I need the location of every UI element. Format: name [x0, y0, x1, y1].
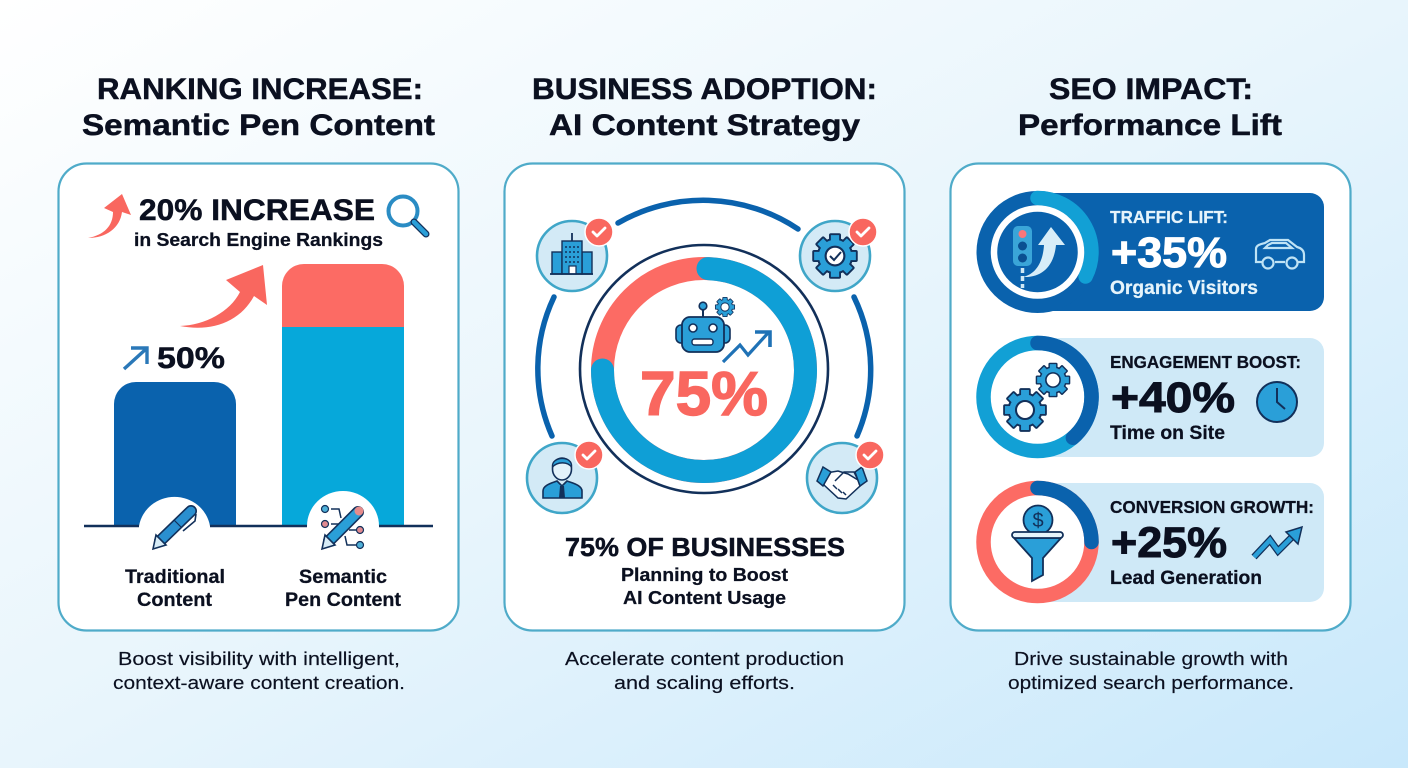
value: 50%: 50%: [157, 342, 225, 375]
title: seo impact: SEO IMPACT:: [1049, 73, 1253, 106]
caption: ranking increase: [113, 649, 405, 693]
caption: seo impact: optimized search performance.: [1008, 673, 1294, 693]
ring arc: [984, 343, 1092, 451]
icon: robot: [676, 297, 735, 352]
label: traditional content: [125, 567, 225, 611]
caption: seo impact: Drive sustainable growth with: [1014, 649, 1288, 669]
stat text: engagement boost: Time on Site: [1110, 423, 1225, 444]
icon: clock: [1257, 382, 1297, 422]
value: 75%: 75%: [640, 360, 768, 429]
panel: seo impact: [950, 164, 1350, 630]
icon: traffic light with arrow: [1013, 226, 1065, 288]
icon: semantic pen: [307, 491, 379, 562]
icon: small coral arrow: [88, 194, 131, 238]
icon: handshake: [807, 443, 877, 513]
subheading: search engine rankings: in Search Engine Rankings: [134, 230, 383, 250]
panel: ranking increase: [58, 164, 458, 630]
bar: semantic pen content: [282, 264, 404, 526]
stat text: 75% of businesses: AI Content Usage: [623, 587, 786, 608]
stat text: traffic lift: [1110, 207, 1258, 299]
orbit arcs: [538, 200, 871, 436]
bar: traditional content: [114, 382, 236, 526]
title: ranking increase: Semantic Pen Content: [82, 109, 435, 142]
stat text: engagement boost: ENGAGEMENT BOOST:: [1110, 352, 1301, 372]
stat text: 75% of businesses: Planning to Boost: [621, 564, 788, 585]
stat text: conversion growth: +25%: [1111, 519, 1227, 567]
icon: trend arrow: [723, 332, 770, 362]
icon: growth arrow: [1254, 527, 1302, 557]
icon: large coral arrow: [180, 265, 267, 328]
card: engagement boost: [984, 338, 1324, 457]
title: ranking increase: RANKING INCREASE:: [97, 73, 423, 106]
stat text: conversion growth: [1110, 497, 1314, 589]
title: business adoption: BUSINESS ADOPTION:: [532, 73, 877, 106]
title: seo impact: Performance Lift: [1018, 109, 1282, 142]
icon: funnel with coin: $: [1032, 510, 1044, 532]
axis: [84, 525, 433, 527]
stat text: engagement boost: +40%: [1111, 374, 1235, 422]
stat text: conversion growth: Lead Generation: [1110, 568, 1262, 589]
stat text: traffic lift: TRAFFIC LIFT:: [1110, 207, 1228, 227]
caption: business adoption: [565, 649, 844, 693]
bar chart: [84, 264, 433, 526]
panel: business adoption: [504, 164, 904, 630]
outer ring: [580, 245, 828, 493]
label: semantic pen content: [285, 567, 402, 611]
icon: business person: [527, 443, 597, 513]
caption: business adoption: and scaling efforts.: [614, 673, 795, 693]
icon: office building: [537, 221, 607, 291]
title: business adoption: [532, 73, 877, 142]
caption: seo impact: [1008, 649, 1294, 693]
title: business adoption: AI Content Strategy: [549, 109, 860, 142]
icon: small blue arrow: [124, 348, 147, 369]
stat text: traffic lift: Organic Visitors: [1110, 278, 1258, 299]
label: semantic pen content: Pen Content: [285, 590, 402, 611]
icon: settings gear: [800, 221, 870, 291]
title: ranking increase: [82, 73, 435, 142]
stat text: traffic lift: +35%: [1111, 229, 1227, 277]
headline: 20% increase: 20% INCREASE: [139, 194, 375, 227]
stat text: 75% of businesses: 75% OF BUSINESSES: [565, 532, 845, 562]
card: conversion growth: [984, 483, 1324, 602]
label: semantic pen content: Semantic: [299, 567, 387, 588]
donut chart: 75%: [602, 268, 806, 472]
caption: business adoption: Accelerate content production: [565, 649, 844, 669]
icon: funnel with coin: [1012, 506, 1063, 581]
caption: ranking increase: Boost visibility with intelligent,: [118, 649, 400, 669]
icon: magnifier: [388, 196, 426, 234]
ring arc: [1038, 198, 1091, 276]
icon: traditional pen: [139, 497, 210, 562]
label: traditional content: Traditional: [125, 567, 225, 588]
caption: ranking increase: context-aware content creation.: [113, 673, 405, 693]
stat text: engagement boost: [1110, 352, 1301, 444]
ring arc: [984, 488, 1092, 596]
label: traditional content: Content: [137, 590, 213, 611]
card: traffic lift: [976, 191, 1324, 313]
icon: car: [1256, 240, 1304, 268]
stat text: conversion growth: CONVERSION GROWTH:: [1110, 497, 1314, 517]
stat text: 75% of businesses: [565, 532, 845, 608]
check badges: [575, 218, 884, 469]
title: seo impact: [1018, 73, 1282, 142]
icon: gears: [1003, 363, 1070, 432]
